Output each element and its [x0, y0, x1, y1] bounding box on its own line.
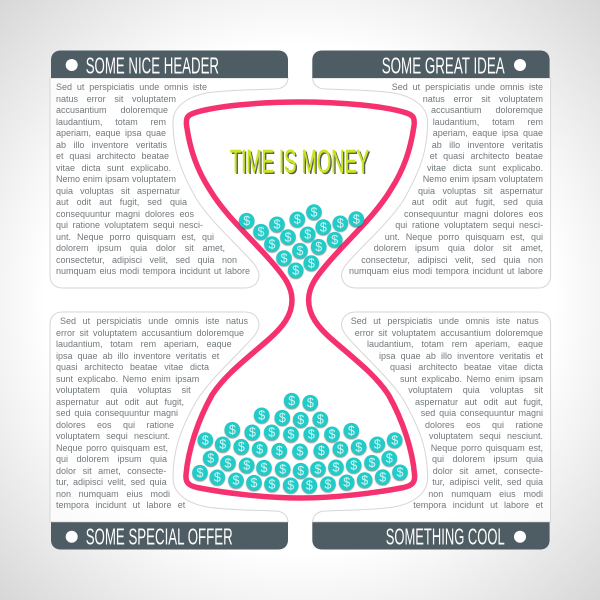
coins: bottom bulb: $ — [287, 479, 294, 493]
text block: top left: et quasi architecto beatae — [56, 151, 169, 161]
coins: top bulb — [239, 204, 364, 278]
text block: bottom left: voluptatem quia voluptas sit — [56, 385, 191, 395]
coins: bottom bulb: $ — [350, 459, 357, 473]
text block: top left: vitae dicta sunt explicabo. — [56, 163, 171, 173]
text block: bottom left: Neque porro quisquam est, — [56, 443, 168, 453]
text block: bottom left: ipsa quae ab illo inventore veritatis et — [56, 351, 219, 361]
coins: bottom bulb: $ — [391, 433, 398, 447]
panel: top right outline — [313, 78, 551, 288]
text block: bottom left: non numquam eius modi — [56, 489, 170, 499]
coins: top bulb: $ — [285, 230, 292, 244]
coins: bottom bulb: $ — [258, 409, 265, 423]
text block: top left: unt. Neque porro quisquam est, qui — [56, 232, 214, 242]
text block: bottom right: non numquam eius modi — [428, 489, 543, 499]
text block: bottom left: qui dolorem ipsum quia — [56, 454, 167, 464]
header: something cool — [312, 522, 550, 550]
coins: bottom bulb: $ — [307, 396, 314, 410]
coins: top bulb: $ — [274, 218, 281, 232]
header: some special offer: SOME SPECIAL OFFER — [86, 524, 233, 550]
coins: bottom bulb: $ — [288, 428, 295, 442]
coins: bottom bulb: $ — [197, 466, 204, 480]
text block: top left: consectetur, adipisci velit, sed quia non — [56, 255, 237, 265]
text block: top right: ab illo inventore veritatis — [432, 140, 543, 150]
text block: bottom left: dolores eos qui ratione — [56, 420, 174, 430]
coins: top bulb: $ — [269, 237, 276, 251]
header: something cool: SOMETHING COOL — [386, 524, 505, 550]
coins: top bulb: $ — [258, 225, 265, 239]
text block: top right: et quasi architecto beatae — [430, 151, 543, 161]
coins: bottom bulb: $ — [355, 440, 362, 454]
text block: top left: aut odit aut fugit, sed quia — [56, 197, 187, 207]
text block: top left: quia voluptas sit aspernatur — [56, 186, 180, 196]
text block: top right: quia voluptas sit aspernatur — [418, 186, 543, 196]
text block: bottom right: quasi architecto beatae vitae dicta — [390, 362, 543, 372]
coins: bottom bulb — [192, 393, 408, 493]
coins: top bulb: $ — [311, 205, 318, 219]
text block: top right: Nemo enim ipsam voluptatem — [423, 174, 543, 184]
coins: bottom bulb: $ — [386, 452, 393, 466]
text block: bottom right: tur, adipisci velit, sed quia — [432, 477, 543, 487]
coins: bottom bulb: $ — [306, 479, 313, 493]
coins: bottom bulb: $ — [333, 461, 340, 475]
coins: top bulb: $ — [320, 220, 327, 234]
text block: top left: dolorem ipsum quia dolor sit amet, — [56, 243, 225, 253]
panel: bottom right outline — [313, 312, 551, 522]
text block: bottom right: ipsa quae ab illo inventore veritatis et — [379, 351, 543, 361]
coins: top bulb: $ — [297, 244, 304, 258]
coins: bottom bulb: $ — [325, 477, 332, 491]
text block: bottom right: dolores eos qui ratione — [425, 420, 543, 430]
coins: bottom bulb: $ — [279, 462, 286, 476]
text block: top left: qui ratione voluptatem sequi nesci- — [56, 220, 203, 230]
coins: top bulb: $ — [331, 233, 338, 247]
text block: top right: unt. Neque porro quisquam est, qui — [385, 232, 543, 242]
coins: top bulb: $ — [243, 214, 250, 228]
title: time is money: TIME IS MONEY — [230, 143, 369, 179]
text block: top left: laudantium, totam rem — [56, 117, 166, 127]
coins: bottom bulb: $ — [279, 411, 286, 425]
text block: bottom right: voluptatem quia voluptas sit — [408, 385, 543, 395]
text block: bottom left: sed quia consequuntur magni — [56, 408, 178, 418]
coins: bottom bulb: $ — [243, 459, 250, 473]
title: time is money — [230, 143, 370, 181]
text block: bottom right: sed quia consequuntur magni — [421, 408, 543, 418]
coins: bottom bulb: $ — [297, 464, 304, 478]
coins: bottom bulb: $ — [202, 433, 209, 447]
text block: top left: Sed ut perspiciatis unde omnis iste — [56, 82, 207, 92]
text block: top right: consequuntur magni dolores eos — [404, 209, 543, 219]
text block: top right: vitae dicta sunt explicabo. — [427, 163, 543, 173]
text block: bottom right: aspernatur aut odit aut fugit, — [415, 397, 543, 407]
text block: top right: Sed ut perspiciatis unde omnis iste — [392, 82, 543, 92]
text block: top right: numquam eius modi tempora incidunt ut labore — [349, 266, 543, 276]
header: some special offer — [51, 522, 288, 550]
header: some nice header: SOME NICE HEADER — [86, 52, 219, 78]
coins: bottom bulb: $ — [379, 470, 386, 484]
coins: top bulb: $ — [315, 240, 322, 254]
text block: top right: aperiam, eaque ipsa quae — [433, 128, 543, 138]
coins: bottom bulb: $ — [233, 474, 240, 488]
coins: bottom bulb: $ — [225, 456, 232, 470]
header: some great idea — [312, 50, 550, 78]
coins: bottom bulb: $ — [361, 473, 368, 487]
coins: bottom bulb: $ — [288, 394, 295, 408]
text block: bottom right: Sed ut perspiciatis unde omnis iste natus — [351, 316, 539, 326]
text block: top left: accusantium doloremque — [56, 105, 168, 115]
header: some great idea: SOME GREAT IDEA — [382, 52, 505, 78]
text block: bottom left: sunt explicabo. Nemo enim ipsam — [56, 374, 199, 384]
coins: bottom bulb: $ — [249, 426, 256, 440]
text block: bottom right: laudantium, totam rem aperiam, eaque — [367, 339, 543, 349]
text block: top left: ab illo inventore veritatis — [56, 140, 167, 150]
coins: top bulb: $ — [304, 228, 311, 242]
coins: top bulb: $ — [337, 217, 344, 231]
text block: top left: consequuntur magni dolores eos — [56, 209, 194, 219]
coins: top bulb: $ — [353, 212, 360, 226]
text block: top right: natus error sit voluptatem — [423, 94, 543, 104]
text block: top left: Nemo enim ipsam voluptatem — [56, 174, 176, 184]
text block: bottom right: voluptatem sequi nesciunt. — [429, 431, 543, 441]
text block: top left: natus error sit voluptatem — [56, 94, 176, 104]
hourglass outline — [186, 102, 415, 498]
coins: top bulb: $ — [308, 256, 315, 270]
coins: bottom bulb: $ — [214, 471, 221, 485]
coins: bottom bulb: $ — [238, 440, 245, 454]
text block: bottom right: dolor sit amet, consecte- — [433, 466, 543, 476]
coins: bottom bulb: $ — [251, 476, 258, 490]
panel: bottom left outline — [50, 312, 288, 522]
coins: bottom bulb: $ — [369, 456, 376, 470]
text block: top right: qui ratione voluptatem sequi nesci- — [395, 220, 543, 230]
text block: top left: aperiam, eaque ipsa quae — [56, 128, 166, 138]
text block: top right: aut odit aut fugit, sed quia — [412, 197, 543, 207]
text block: bottom left: aspernatur aut odit aut fugit, — [56, 397, 184, 407]
coins: bottom bulb: $ — [343, 476, 350, 490]
coins: bottom bulb: $ — [374, 438, 381, 452]
coins: bottom bulb: $ — [329, 428, 336, 442]
coins: top bulb: $ — [281, 251, 288, 265]
coins: bottom bulb: $ — [317, 413, 324, 427]
text block: top right: consectetur, adipisci velit, sed quia non — [361, 255, 543, 265]
text block: top left: numquam eius modi tempora incidunt ut labore — [56, 266, 250, 276]
text block: bottom right: sunt explicabo. Nemo enim ipsam — [400, 374, 543, 384]
text block: bottom left: laudantium, totam rem aperiam, eaque — [56, 339, 232, 349]
text block: bottom left: quasi architecto beatae vitae dicta — [56, 362, 209, 372]
text block: bottom right: error sit voluptatem accusantium doloremque — [355, 328, 543, 338]
text block: bottom right: qui dolorem ipsum quia — [432, 454, 543, 464]
coins: bottom bulb: $ — [308, 428, 315, 442]
panel: top left outline — [50, 78, 288, 288]
coins: top bulb: $ — [294, 213, 301, 227]
text block: bottom left: dolor sit amet, consecte- — [56, 466, 166, 476]
coins: bottom bulb: $ — [337, 442, 344, 456]
coins: bottom bulb: $ — [297, 445, 304, 459]
coins: bottom bulb: $ — [261, 461, 268, 475]
coins: top bulb: $ — [292, 264, 299, 278]
coins: bottom bulb: $ — [269, 477, 276, 491]
coins: bottom bulb: $ — [207, 452, 214, 466]
text block: bottom right: Neque porro quisquam est, — [431, 443, 543, 453]
text block: bottom left: error sit voluptatem accusantium doloremque — [56, 328, 244, 338]
text block: bottom left: Sed ut perspiciatis unde omnis iste natus — [60, 316, 248, 326]
text block: bottom right: tempora incidunt ut labore et — [413, 500, 543, 510]
coins: bottom bulb: $ — [256, 442, 263, 456]
coins: bottom bulb: $ — [318, 444, 325, 458]
coins: bottom bulb: $ — [268, 426, 275, 440]
text block: bottom left: voluptatem sequi nesciunt. — [56, 431, 170, 441]
coins: bottom bulb: $ — [397, 466, 404, 480]
text block: top right: dolorem ipsum quia dolor sit amet, — [374, 243, 543, 253]
coins: bottom bulb: $ — [229, 423, 236, 437]
text block: top right: accusantium doloremque — [431, 105, 543, 115]
coins: bottom bulb: $ — [315, 462, 322, 476]
coins: bottom bulb: $ — [276, 444, 283, 458]
coins: bottom bulb: $ — [219, 438, 226, 452]
text block: bottom left: tur, adipisci velit, sed quia — [56, 477, 167, 487]
title: time is money: TIME IS MONEY — [232, 145, 370, 181]
coins: bottom bulb: $ — [297, 413, 304, 427]
text block: bottom left: tempora incidunt ut labore et — [56, 500, 185, 510]
text block: top right: laudantium, totam rem — [433, 117, 543, 127]
coins: bottom bulb: $ — [348, 424, 355, 438]
